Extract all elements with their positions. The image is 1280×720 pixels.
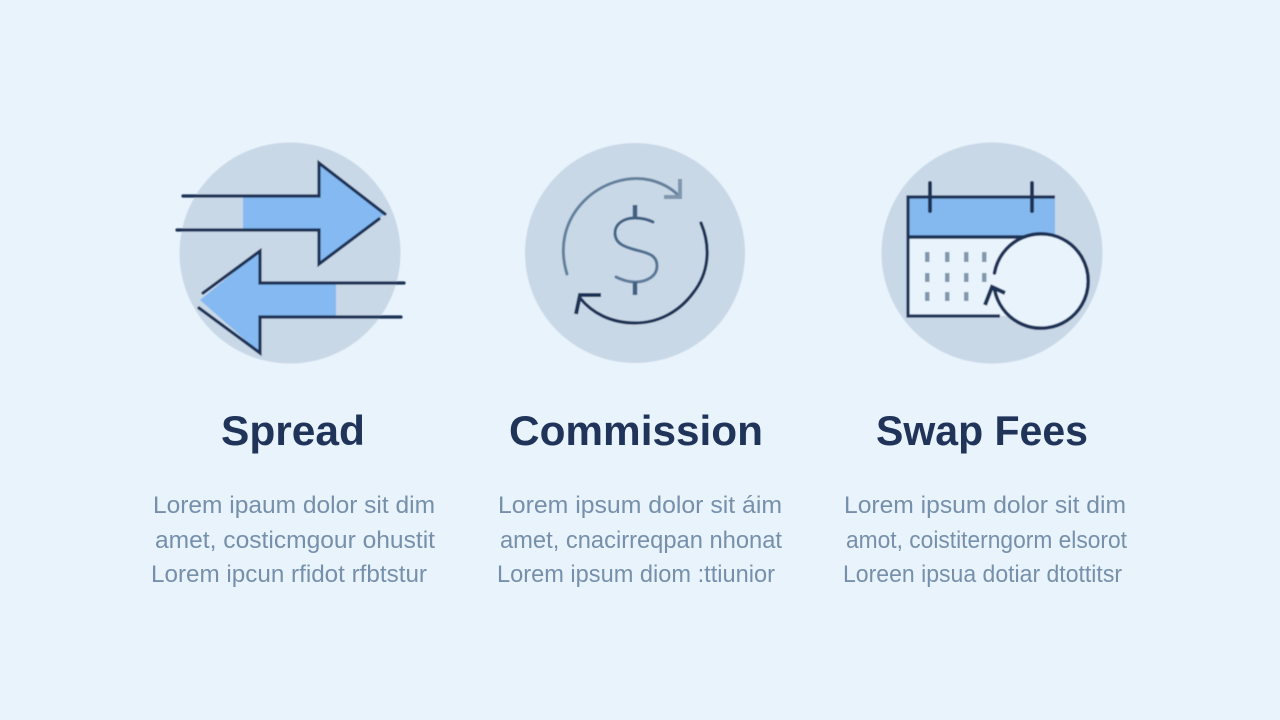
- panel: commission: [497, 143, 782, 588]
- text block: swap fees description: [843, 492, 1127, 588]
- heading: Spread: Spread: [221, 407, 365, 454]
- heading: Swap Fees: Swap Fees: [876, 407, 1088, 454]
- text block: commission description: Lorem ipsum dolor sit áim: [498, 492, 782, 519]
- text block: swap fees description: amot, coistiterngorm elsorot: [846, 527, 1127, 554]
- text block: swap fees description: Lorem ipsum dolor sit dim: [844, 492, 1126, 519]
- calendar date dots: [925, 252, 986, 301]
- heading: Commission: Commission: [509, 407, 763, 454]
- icon: calendar with circular arrow: [882, 142, 1102, 364]
- text block: commission description: Lorem ipsum diom :ttiunior: [497, 561, 775, 588]
- icon: dollar with circular arrows: [525, 143, 745, 363]
- text block: commission description: amet, cnacirreqpan nhonat: [500, 527, 782, 554]
- icon: exchange arrows: [177, 142, 404, 364]
- text block: spread description: [151, 492, 435, 588]
- panel: swap fees: [843, 142, 1127, 588]
- text block: spread description: Lorem ipaum dolor sit dim: [153, 492, 435, 519]
- text block: swap fees description: Loreen ipsua dotiar dtottitsr: [843, 561, 1122, 588]
- icon: dollar sign: [615, 205, 657, 295]
- panel: spread: [151, 142, 435, 588]
- text block: spread description: amet, costicmgour ohustit: [155, 527, 435, 554]
- text block: spread description: Lorem ipcun rfidot rfbtstur: [151, 561, 427, 588]
- text block: commission description: [497, 492, 782, 588]
